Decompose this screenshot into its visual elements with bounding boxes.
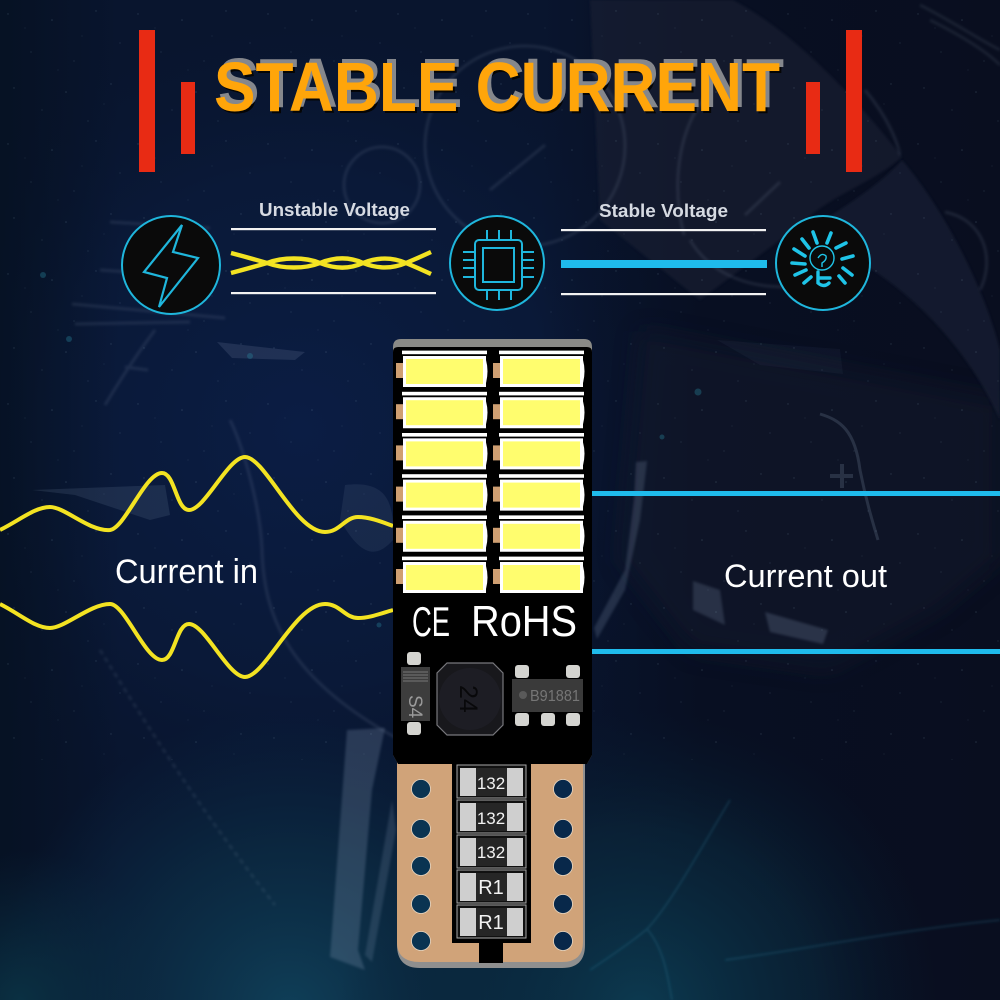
inductor: 24: [454, 685, 482, 713]
copper base: [397, 755, 585, 968]
title: Stable Current: STABLE CURRENT: [214, 48, 780, 126]
label: Current out: Current out: [724, 558, 887, 594]
LED bulb board: [393, 339, 592, 968]
icon: lightning bolt: [122, 216, 220, 314]
black PCB top: [393, 339, 592, 764]
icon: chip: [450, 216, 544, 310]
RoHS mark: RoHS: [471, 597, 577, 646]
resistor block: 132: [477, 843, 505, 862]
current out: upper line: [592, 491, 1000, 496]
CE mark: CE: [412, 598, 450, 645]
title: Stable Current: STABLE CURRENT: [216, 50, 782, 128]
mounting holes: [412, 780, 572, 950]
IC B91881: [512, 665, 583, 726]
red accent bars right: [806, 30, 862, 172]
icon: light bulb: [776, 216, 870, 310]
inductor: [437, 663, 503, 735]
resistor block: R1: [478, 912, 504, 934]
stable voltage rails and line: [561, 229, 767, 295]
label: Unstable Voltage: Unstable Voltage: [259, 199, 410, 220]
title: Stable Current: STABLE CURRENT: [218, 44, 784, 122]
resistor block: 132: [477, 774, 505, 793]
LED array: [396, 351, 584, 593]
diode S4: S4: [404, 695, 425, 719]
resistor block: [452, 763, 531, 963]
resistor block: 132: [477, 809, 505, 828]
current in: upper wave: [0, 457, 393, 532]
resistor block: R1: [478, 877, 504, 899]
current out: lower line: [592, 649, 1000, 654]
IC B91881: B91881: [530, 688, 580, 705]
red accent bars left: [139, 30, 195, 172]
diode S4: [401, 652, 430, 735]
label: Current in: Current in: [115, 553, 258, 591]
label: Stable Voltage: Stable Voltage: [599, 201, 728, 221]
current in: lower wave: [0, 604, 393, 677]
unstable voltage rails and wave: [231, 228, 436, 294]
